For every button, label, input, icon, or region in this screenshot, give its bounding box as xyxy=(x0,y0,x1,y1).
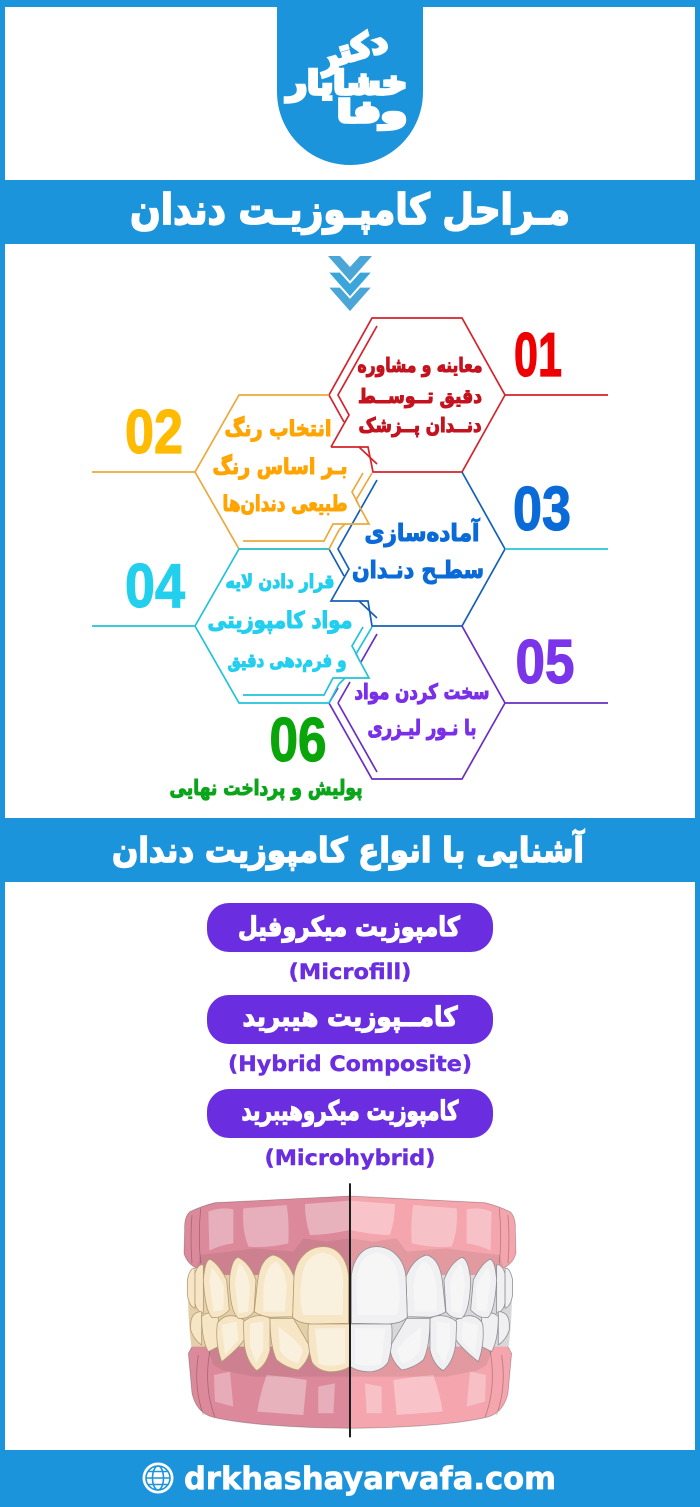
step 02 number: 02 xyxy=(125,398,183,467)
icon: globe xyxy=(142,1462,174,1494)
website address: drkhashayarvafa.com xyxy=(184,1461,556,1497)
upper and lower gums, left xyxy=(184,1196,350,1428)
yellow teeth, left xyxy=(187,1247,350,1372)
english label: (Hybrid Composite) xyxy=(228,1052,472,1076)
step 06 xyxy=(170,706,362,800)
upper and lower gums, right xyxy=(350,1196,516,1428)
step 03 connector and hexagon xyxy=(329,472,608,626)
step 03 text: آماده‌سازی xyxy=(364,518,480,547)
step 02 text: طبیعی دندان‌ها xyxy=(222,492,348,517)
step 04 text: و فرم‌دهی دقیق xyxy=(228,650,346,672)
step 01 text: دقیق تــوســط xyxy=(358,384,482,408)
logo text xyxy=(285,21,407,130)
step 04 number: 04 xyxy=(125,552,185,621)
step 04 text: مواد کامپوزیتی xyxy=(208,608,352,634)
logo text: دکتر xyxy=(312,21,392,78)
step 05 text: با نـور لیـزری xyxy=(368,716,476,740)
step 02 connector and hexagon xyxy=(92,395,372,549)
step 01 number: 01 xyxy=(514,321,562,390)
step 04 text xyxy=(208,571,352,672)
step 01 text xyxy=(358,353,482,438)
english label: (Microfill) xyxy=(288,960,412,984)
step 06 number: 06 xyxy=(270,706,326,775)
step 01 text: دنــدان پــزشک xyxy=(358,413,482,438)
type: microhybrid xyxy=(207,1089,493,1170)
heading band: stages xyxy=(0,180,700,244)
heading text: آشنایی با انواع کامپوزیت دندان xyxy=(112,829,585,871)
step 05 text: سخت کردن مواد xyxy=(354,680,490,704)
type: microfill xyxy=(207,903,493,984)
step 04 connector and hexagon xyxy=(92,549,372,703)
logo text: خشایار xyxy=(285,64,407,102)
step 01 text: معاینه و مشاوره xyxy=(358,353,482,377)
pill label: کامپوزیت میکروهیبرید xyxy=(242,1096,459,1127)
english label: (Microhybrid) xyxy=(264,1146,436,1170)
step 05 text xyxy=(354,680,490,740)
icon: triple chevron arrow xyxy=(328,256,372,312)
step 06 text: پولیش و پرداخت نهایی xyxy=(170,776,362,800)
step 03 number: 03 xyxy=(513,475,571,544)
illustration: teeth before and after whitening xyxy=(184,1183,516,1437)
footer band xyxy=(0,1450,700,1507)
step 04 text: قرار دادن لایه xyxy=(226,571,334,593)
divider line xyxy=(349,1183,351,1437)
step 05 number: 05 xyxy=(516,628,574,697)
step 03 text xyxy=(352,518,484,584)
pill label: کامــپوزیت هیبرید xyxy=(242,1002,458,1033)
step 02 text: انتخاب رنگ xyxy=(224,415,332,442)
logo badge xyxy=(277,5,423,165)
heading band: types xyxy=(0,818,700,882)
step 02 text: بـر اساس رنگ xyxy=(212,453,348,480)
heading text: مـراحل کامپـوزیـت دندان xyxy=(130,185,570,235)
step 03 text: سطـح دنـدان xyxy=(352,556,484,584)
pill label: کامپوزیت میکروفیل xyxy=(238,912,460,943)
white teeth, right xyxy=(350,1247,513,1372)
step 02 text xyxy=(212,415,348,517)
type: hybrid xyxy=(207,995,493,1076)
step 05 connector and hexagon xyxy=(329,626,608,779)
logo text: وفا xyxy=(337,95,407,130)
step 01 connector and hexagon xyxy=(329,318,608,472)
